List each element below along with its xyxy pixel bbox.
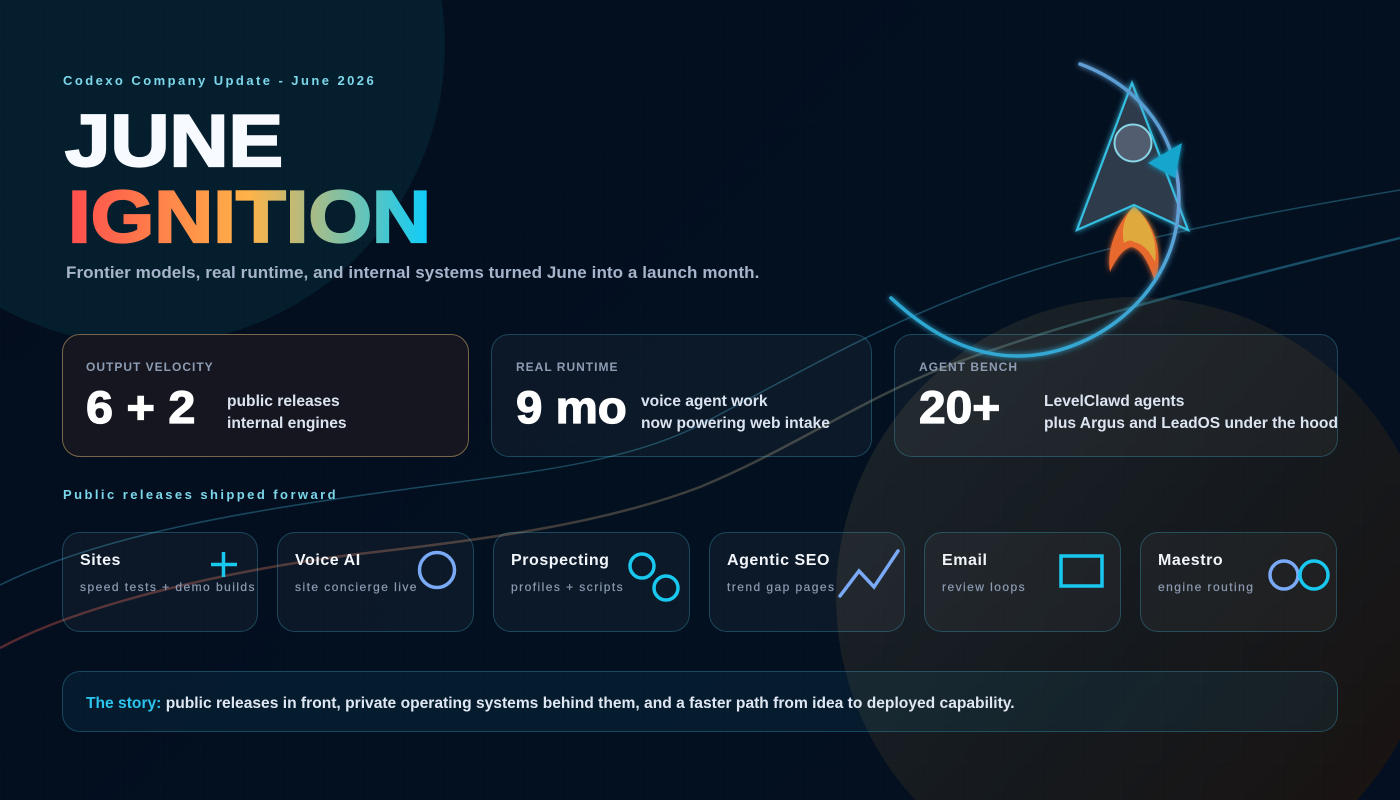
description: internal engines <box>227 415 347 432</box>
icon: rectangle <box>1061 556 1102 586</box>
section heading: Public releases shipped forward <box>63 487 338 502</box>
card: maestro <box>1140 532 1337 632</box>
flame <box>1109 206 1159 282</box>
detail: trend gap pages <box>727 580 836 594</box>
orbit arc <box>891 64 1179 356</box>
stat: 20+ <box>919 382 1000 432</box>
panel: agent bench <box>894 334 1338 457</box>
flow line: teal <box>0 190 1400 585</box>
title: IGNITION <box>68 175 431 258</box>
detail: site concierge live <box>295 580 418 594</box>
detail: speed tests + demo builds <box>80 580 256 594</box>
description: public releases <box>227 393 340 410</box>
label: AGENT BENCH <box>919 360 1018 374</box>
circle: bottom right glow <box>836 297 1400 800</box>
icon: trend line <box>840 551 898 596</box>
name: Sites <box>80 552 121 569</box>
title <box>64 99 431 258</box>
orbit arrowhead <box>1148 143 1182 178</box>
panel: output velocity <box>62 334 469 457</box>
description: now powering web intake <box>641 415 830 432</box>
card: prospecting <box>493 532 690 632</box>
circle: top left glow <box>0 0 445 345</box>
card: voice ai <box>277 532 474 632</box>
name: Maestro <box>1158 552 1223 569</box>
description: plus Argus and LeadOS under the hood <box>1044 415 1338 432</box>
description <box>1044 393 1338 432</box>
description <box>641 393 830 432</box>
icon: paired rings <box>1270 561 1328 589</box>
icon: plus <box>211 552 237 577</box>
card: agentic seo <box>709 532 905 632</box>
description <box>227 393 347 432</box>
subtitle: Frontier models, real runtime, and internal systems turned June into a launch month. <box>66 263 759 282</box>
detail: review loops <box>942 580 1026 594</box>
eyebrow: Codexo Company Update - June 2026 <box>63 73 376 88</box>
icon: rocket with orbit <box>891 64 1188 356</box>
card: sites <box>62 532 258 632</box>
title: JUNE <box>65 99 283 182</box>
label: REAL RUNTIME <box>516 360 618 374</box>
callout: the story <box>62 671 1338 732</box>
story text: The story: public releases in front, private operating systems behind them, and a faster path from idea to deployed capability. <box>86 695 1015 712</box>
description: voice agent work <box>641 393 768 410</box>
icon: linked circles <box>630 554 678 600</box>
name: Email <box>942 552 987 569</box>
description: LevelClawd agents <box>1044 393 1184 410</box>
name: Voice AI <box>295 552 361 569</box>
panel: real runtime <box>491 334 872 457</box>
label: OUTPUT VELOCITY <box>86 360 214 374</box>
name: Agentic SEO <box>727 552 830 569</box>
rocket body <box>1077 83 1188 230</box>
name: Prospecting <box>511 552 610 569</box>
stat: 9 mo <box>516 382 627 432</box>
card: email <box>924 532 1121 632</box>
flow line: ember <box>0 238 1400 648</box>
icon: ring <box>420 552 454 588</box>
stat: 6 + 2 <box>86 382 195 432</box>
detail: engine routing <box>1158 580 1254 594</box>
rocket window <box>1114 124 1152 162</box>
detail: profiles + scripts <box>511 580 624 594</box>
